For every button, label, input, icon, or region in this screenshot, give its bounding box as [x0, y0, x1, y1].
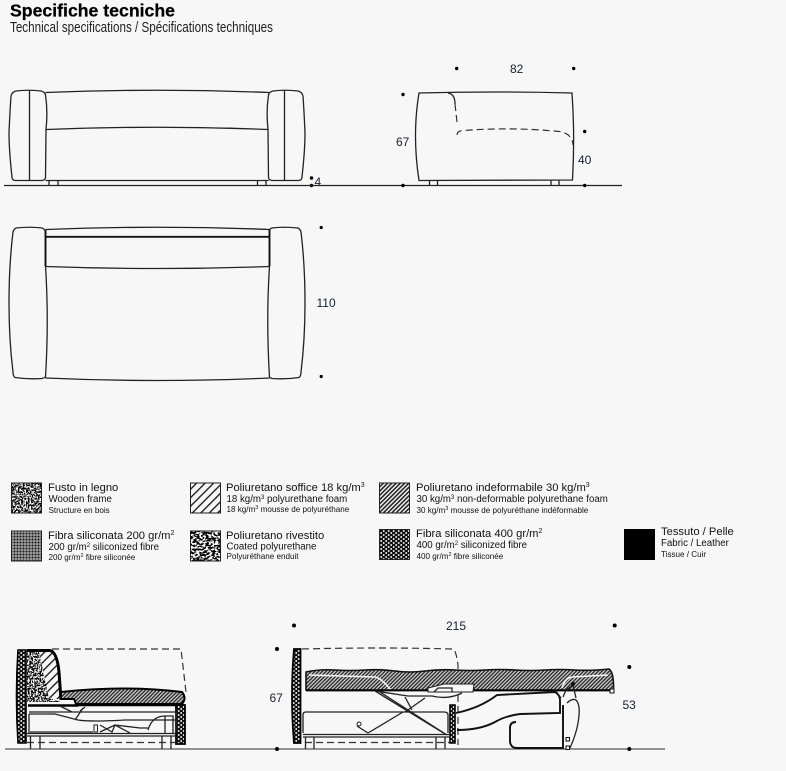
side body outline [416, 92, 574, 180]
top view drawing [9, 227, 305, 380]
top left armrest [9, 227, 47, 379]
legend: soft polyurethane foam: 3 [255, 505, 258, 511]
closed sofa-bed section [16, 649, 186, 749]
legend: wooden frame [12, 482, 118, 515]
open: dashed outline [302, 648, 458, 745]
dimension: mattress height 53 [622, 665, 636, 751]
open: storage box [510, 705, 563, 748]
legend: non-deformable polyurethane foam: 30 kg/m [416, 506, 445, 515]
legend: wooden frame: Fusto in legno [48, 482, 118, 494]
legend [12, 482, 734, 562]
dimension: seat height 40: 40 [578, 153, 592, 167]
legend: non-deformable polyurethane foam: 3 [451, 495, 455, 501]
open: mattress inner bands [309, 675, 608, 689]
open sofa-bed section [292, 648, 614, 750]
legend: siliconized fibre 400: 2 [448, 552, 452, 558]
dimension: foot height 4: 4 [314, 175, 322, 189]
closed: pin [94, 725, 98, 732]
legend: soft polyurethane foam: 18 kg/m [226, 494, 261, 505]
legend: siliconized fibre 400: 2 [538, 528, 542, 535]
legend: siliconized fibre 200: 2 [87, 543, 91, 549]
front view drawing [9, 90, 305, 185]
backrest and seat [46, 90, 269, 180]
legend: fabric and leather [624, 526, 734, 560]
legend: soft polyurethane foam: 3 [261, 495, 265, 501]
legend: siliconized fibre 200: fibre siliconée [84, 553, 136, 562]
floor line, upper [4, 184, 622, 186]
legend: non-deformable polyurethane foam: 3 [586, 482, 590, 489]
right armrest [267, 90, 305, 180]
legend: siliconized fibre 200: Fibra siliconata 200 gr/m [48, 530, 170, 542]
dimension: depth 110: 110 [316, 296, 336, 310]
open: curved fabric band [456, 692, 560, 730]
floor line, lower [5, 748, 665, 750]
closed: seat cushion [61, 688, 184, 704]
legend: siliconized fibre 400: siliconized fibre [458, 540, 527, 551]
armrest profile [448, 93, 455, 104]
top right armrest [268, 227, 305, 379]
closed: base and feet [27, 734, 176, 736]
open: hinge mechanism [428, 684, 474, 692]
legend: non-deformable polyurethane foam: 3 [445, 506, 448, 512]
dimension: depth 82: 82 [510, 62, 524, 76]
legend: siliconized fibre 200: siliconized fibre [90, 542, 159, 553]
dimension: open height 67: 67 [270, 691, 283, 705]
closed: back cushion outline [27, 650, 61, 700]
legend: fabric and leather: Fabric / Leather [661, 538, 730, 549]
legend: soft polyurethane foam: mousse de polyuréthane [258, 505, 350, 514]
legend: fabric and leather: Tissue / Cuir [661, 550, 706, 559]
legend: siliconized fibre 400: 400 gr/m [416, 540, 455, 551]
closed: back panel [16, 650, 26, 743]
side view drawing [416, 92, 574, 185]
dimension: depth 110 [316, 226, 336, 378]
legend: siliconized fibre 200: 200 gr/m [48, 553, 80, 562]
dimension: height 67 [396, 93, 410, 187]
legend: siliconized fibre 400 [380, 528, 542, 561]
open: back panel [292, 649, 300, 743]
legend: wooden frame: Wooden frame [48, 494, 112, 505]
closed: right panel [176, 705, 185, 744]
dimension: height 67: 67 [396, 135, 410, 149]
legend: non-deformable polyurethane foam: Poliuretano indeformabile 30 kg/m [416, 482, 586, 494]
legend: non-deformable polyurethane foam: non-deformable polyurethane foam [454, 494, 608, 505]
top seat [46, 378, 270, 380]
open: lower frame [303, 712, 448, 733]
legend: siliconized fibre 200: 2 [170, 530, 174, 537]
open: folded arm [567, 699, 579, 748]
legend: non-deformable polyurethane foam: mousse de polyuréthane indéformable [448, 506, 589, 515]
legend: coated polyurethane: Coated polyurethane [226, 542, 316, 552]
closed: back cushion fibre [27, 651, 61, 702]
feet [49, 180, 266, 185]
legend: soft polyurethane foam: 3 [361, 482, 365, 489]
legend: non-deformable polyurethane foam: 30 kg/m [416, 494, 451, 505]
open: right panel [450, 705, 455, 743]
legend: fabric and leather: Tessuto / Pelle [661, 526, 734, 538]
closed: mechanism [29, 706, 176, 733]
title: Specifiche tecniche [10, 0, 175, 20]
dimension: mattress height 53: 53 [622, 698, 636, 712]
top backrest [46, 227, 270, 230]
legend: siliconized fibre 200: 200 gr/m [48, 542, 87, 553]
legend: siliconized fibre 400: 400 gr/m [416, 552, 448, 561]
side feet [430, 180, 559, 185]
dimension: length 215: 215 [446, 619, 466, 633]
subtitle: Technical specifications / Spécifications techniques [10, 19, 273, 36]
dashed seat profile [457, 129, 573, 145]
legend: siliconized fibre 400: Fibra siliconata 400 gr/m [416, 528, 538, 540]
dimension: depth 82 [455, 62, 575, 76]
closed: back cushion foam [39, 650, 60, 699]
dimension: seat height 40 [578, 130, 592, 187]
open: platform [306, 690, 612, 692]
left armrest [9, 90, 47, 180]
open: scissor lift [357, 691, 447, 735]
dimension: foot height 4 [310, 175, 322, 189]
legend: soft polyurethane foam: polyurethane foam [264, 494, 347, 505]
dimension: length 215 [292, 619, 617, 633]
dimension: open height 67 [270, 647, 283, 751]
open: mattress [306, 669, 614, 690]
legend: soft polyurethane foam: Poliuretano soffice 18 kg/m [226, 482, 361, 494]
legend: siliconized fibre 400: 2 [455, 541, 459, 547]
legend: coated polyurethane [190, 530, 324, 561]
legend: soft polyurethane foam: 18 kg/m [226, 505, 255, 514]
legend: non-deformable polyurethane foam [380, 482, 608, 515]
legend: coated polyurethane: Polyuréthane enduit [226, 552, 299, 561]
legend: soft polyurethane foam [190, 482, 365, 514]
legend: siliconized fibre 200: 2 [80, 553, 84, 559]
closed: frame band [28, 703, 176, 706]
closed: dashed outline [52, 649, 186, 692]
legend: siliconized fibre 200 [12, 530, 174, 562]
legend: wooden frame: Structure en bois [48, 506, 110, 515]
legend: siliconized fibre 400: fibre siliconée [452, 552, 504, 561]
legend: coated polyurethane: Poliuretano rivestito [226, 530, 324, 542]
